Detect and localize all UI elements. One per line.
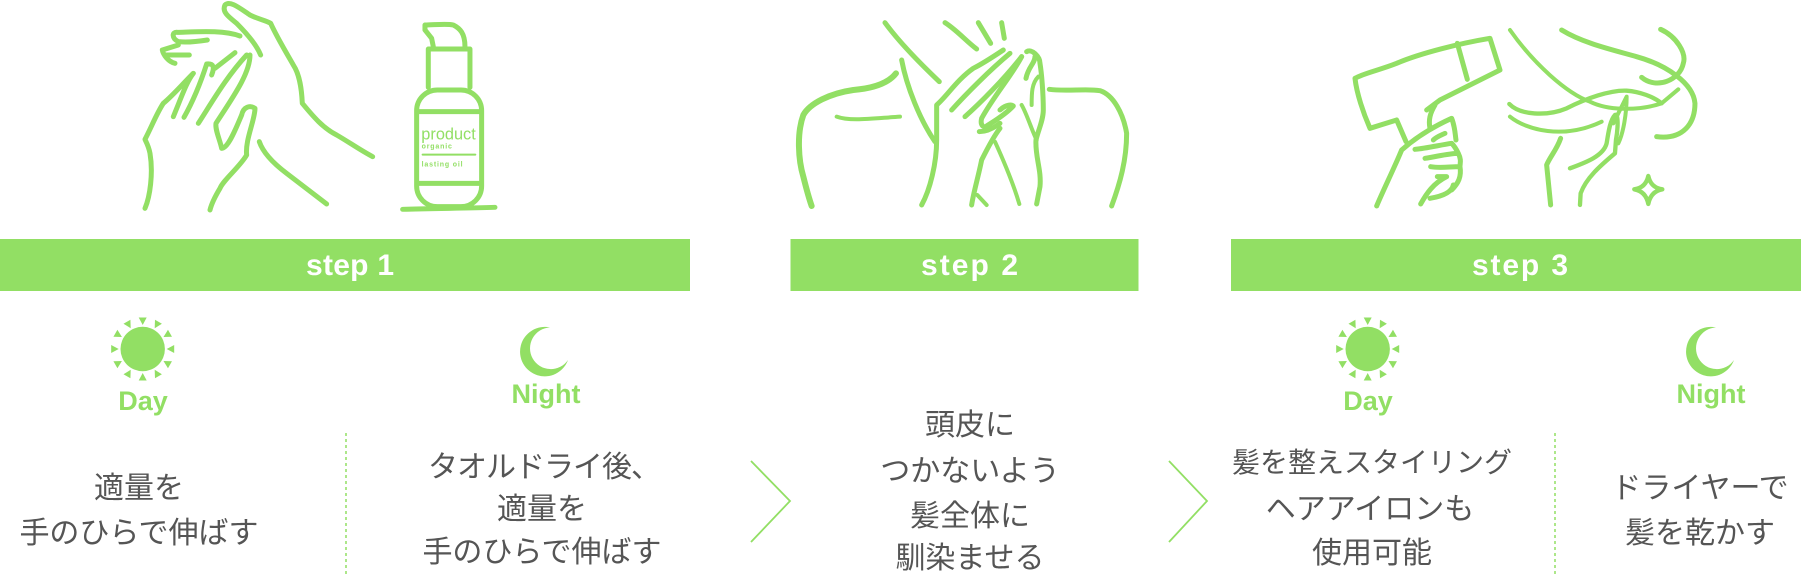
text: step 2 xyxy=(880,409,1060,575)
bottle label: lasting oil xyxy=(422,162,463,169)
text: step 1 day: 手のひらで伸ばす xyxy=(19,517,259,550)
text: step 1 day: 適量を xyxy=(94,472,184,505)
icon: sun step 1 xyxy=(111,318,174,380)
text: step 3 day: 使用可能 xyxy=(1312,537,1432,570)
illustration: hands applying oil xyxy=(145,3,373,210)
step 1 bar: step 1 xyxy=(306,249,394,282)
icon: sun step 3 xyxy=(1336,318,1399,380)
text: step 2: つかないよう xyxy=(880,455,1060,488)
bottle label: organic xyxy=(422,143,453,150)
arrow: step 2 to 3 xyxy=(1169,461,1207,542)
label: Night step 3: Night xyxy=(1677,379,1745,409)
text: step 3 night: 髪を乾かす xyxy=(1625,517,1775,550)
bottle label xyxy=(421,125,476,169)
text: step 2: 頭皮に xyxy=(925,409,1015,442)
icon: moon step 1 xyxy=(520,327,568,376)
step 1 bar xyxy=(0,239,690,291)
illustration: hands on hair at shoulders xyxy=(799,23,1127,206)
text: step 3 day xyxy=(1232,447,1512,570)
step 2 bar: step 2 xyxy=(921,249,1018,282)
text: step 3 day: ヘアアイロンも xyxy=(1266,493,1474,526)
label: Day step 1: Day xyxy=(118,386,168,416)
text: step 2: 馴染ませる xyxy=(895,542,1045,575)
text: step 1 day xyxy=(19,472,259,550)
text: step 1 night: タオルドライ後、 xyxy=(428,451,660,484)
text: step 2: 髪全体に xyxy=(910,500,1030,533)
bottle label: product xyxy=(421,125,476,143)
text: step 3 night: ドライヤーで xyxy=(1611,472,1789,505)
text: step 3 night xyxy=(1611,472,1789,550)
arrow: step 1 to 2 xyxy=(751,461,790,542)
label: Day step 3: Day xyxy=(1343,386,1393,416)
text: step 1 night: 適量を xyxy=(497,493,587,526)
step 3 bar xyxy=(1231,239,1801,291)
icon: sparkle xyxy=(1634,176,1662,204)
text: step 3 day: 髪を整えスタイリング xyxy=(1232,447,1512,478)
step 3 bar: step 3 xyxy=(1472,249,1568,282)
illustration: oil bottle xyxy=(403,24,495,209)
text: step 1 night: 手のひらで伸ばす xyxy=(422,536,662,569)
text: step 1 night xyxy=(422,451,662,569)
label: Night step 1: Night xyxy=(512,379,580,409)
icon: moon step 3 xyxy=(1686,327,1734,376)
illustration: hair dryer and hair xyxy=(1355,29,1695,206)
step 2 bar xyxy=(790,239,1138,291)
